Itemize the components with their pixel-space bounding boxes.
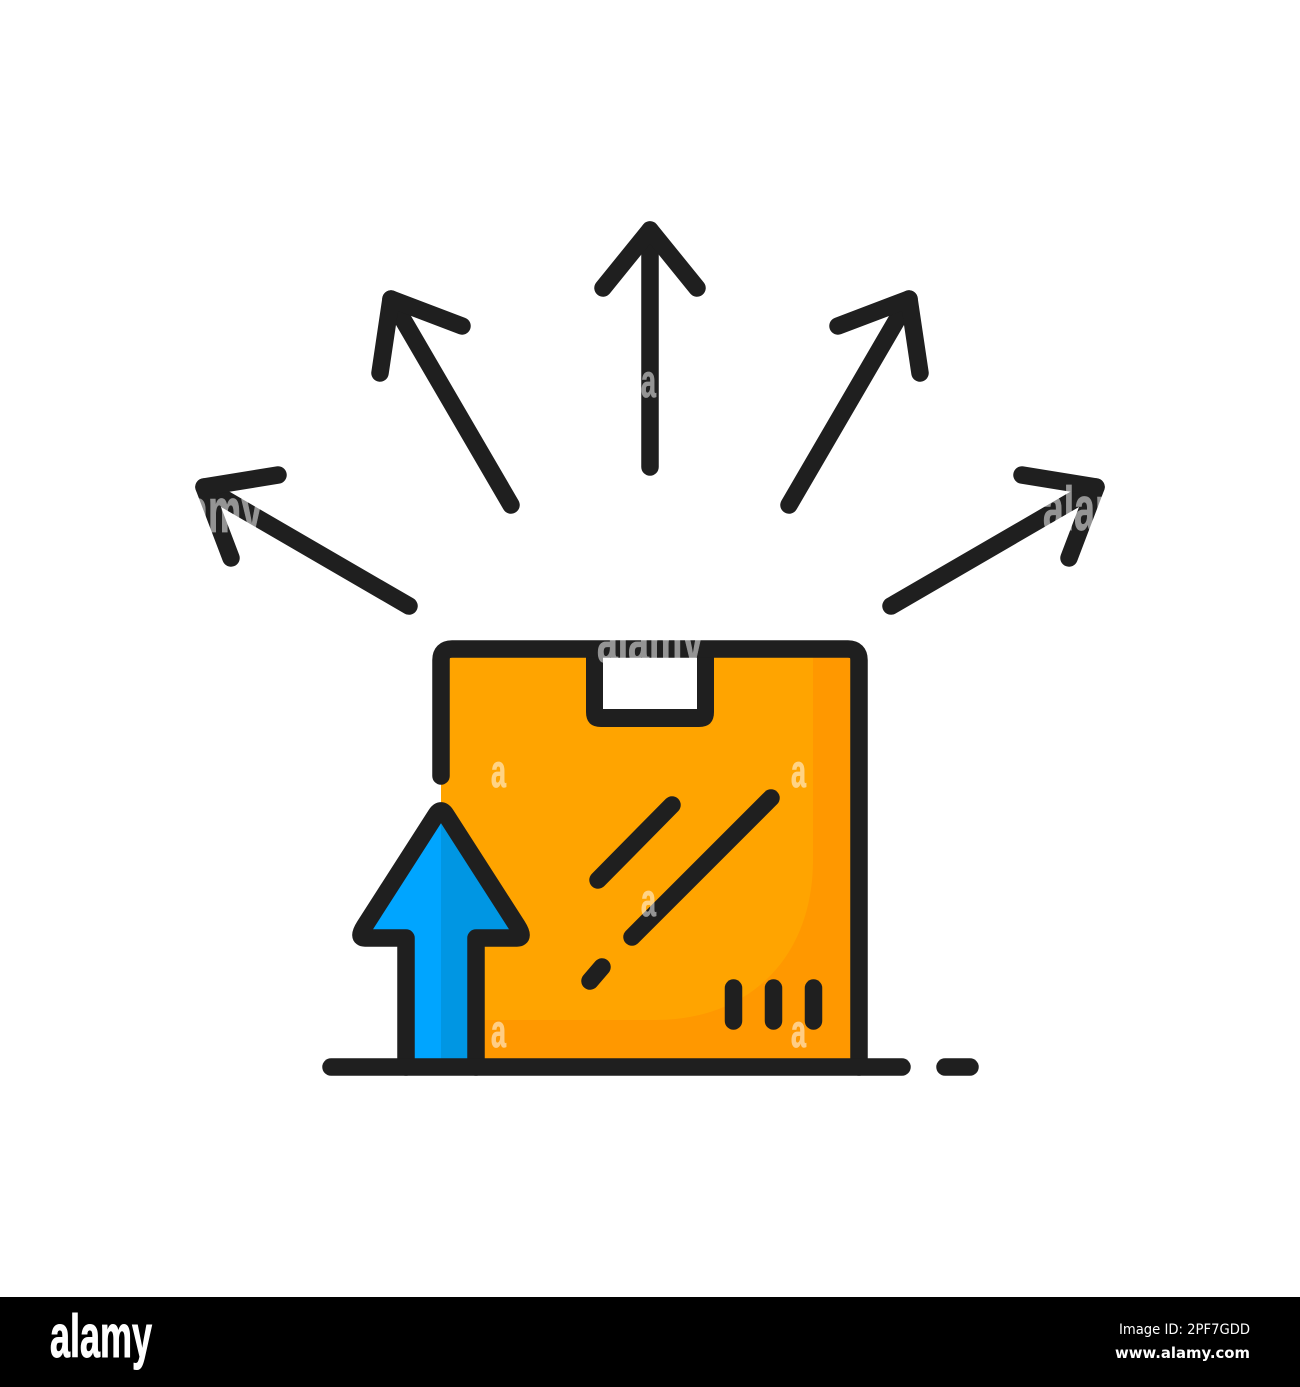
watermark marks: a [641,355,656,407]
footer background [0,1297,1300,1387]
watermark marks: a [491,1005,506,1057]
box tape tab [586,649,714,727]
arrow outline [361,811,521,1067]
arrow: upper right [789,299,920,505]
watermark marks [156,355,1149,1057]
website: www.alamy.com [1115,1344,1250,1362]
cardboard box [441,649,859,1067]
footer logo: alamy [50,1303,152,1370]
watermark marks: alamy [156,477,262,546]
box fill: shaded [441,649,859,1067]
arrow: up [603,230,697,467]
box outline [441,649,859,1067]
box shine lines [590,798,771,981]
arrow: far right [891,475,1096,606]
watermark marks: a [791,745,806,797]
watermark marks: alamy [597,607,703,676]
radiating arrows [204,230,1096,606]
box fill: highlight [441,649,813,1020]
box barcode marks [734,988,814,1021]
arrow fill: right [441,807,525,1067]
watermark marks: alamy [1043,475,1149,544]
footer bar [0,1297,1300,1387]
image id: Image ID: 2PF7GDD [1119,1322,1250,1338]
icon: blue up arrow [357,807,525,1067]
ground line [331,1058,970,1076]
watermark marks: a [641,874,656,926]
watermark marks: a [791,1005,806,1057]
arrow: far left [204,475,409,606]
arrow fill: left [357,807,441,1067]
watermark marks: a [491,745,506,797]
arrow: upper left [380,299,511,505]
